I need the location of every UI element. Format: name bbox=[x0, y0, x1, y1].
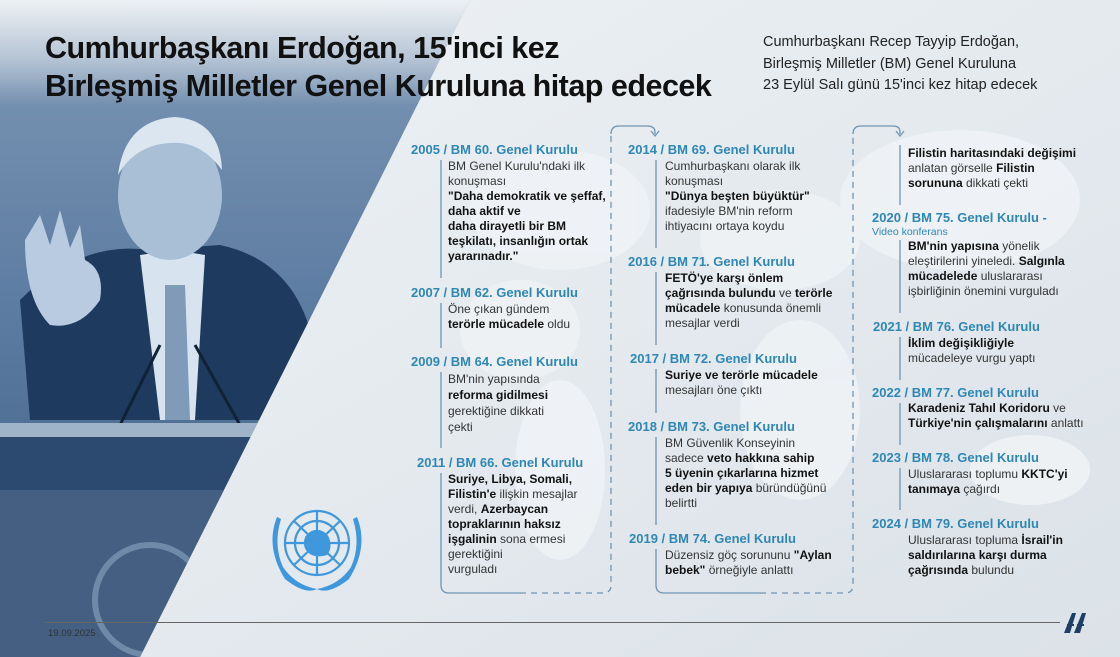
column 1: 2009 / BM 64. Genel Kurulu bbox=[411, 354, 578, 369]
column 3: 2020 / BM 75. Genel Kurulu - bbox=[872, 210, 1047, 225]
column 2: sadece veto hakkına sahip bbox=[665, 451, 814, 465]
title: Birleşmiş Milletler Genel Kuruluna hitap edecek bbox=[45, 69, 711, 103]
column 3: işbirliğinin önemini vurguladı bbox=[908, 284, 1059, 298]
column 3: Türkiye'nin çalışmalarını anlattı bbox=[908, 416, 1084, 430]
microphones bbox=[120, 345, 160, 425]
item 2017 bbox=[630, 351, 818, 397]
column 2: 2016 / BM 71. Genel Kurulu bbox=[628, 254, 795, 269]
column 3: İklim değişikliğiyle bbox=[908, 336, 1014, 350]
column 3: Karadeniz Tahıl Koridoru ve bbox=[908, 401, 1066, 415]
item 2024 bbox=[872, 516, 1063, 577]
column 3: 2021 / BM 76. Genel Kurulu bbox=[873, 319, 1040, 334]
column 1: 2005 / BM 60. Genel Kurulu bbox=[411, 142, 578, 157]
item 2019 continued: anlatan görselle Filistin bbox=[908, 161, 1035, 175]
suit bbox=[20, 245, 320, 420]
column 1: BM'nin yapısında bbox=[448, 372, 540, 386]
photo: Erdoğan at UN podium bbox=[0, 0, 470, 657]
item 2023 bbox=[872, 450, 1068, 496]
column 2: Suriye ve terörle mücadele bbox=[665, 368, 818, 382]
column 1: Öne çıkan gündem bbox=[448, 302, 549, 316]
item 2016 bbox=[628, 254, 832, 330]
column 3: mücadeleye vurgu yaptı bbox=[908, 351, 1035, 365]
column 3: 2024 / BM 79. Genel Kurulu bbox=[872, 516, 1039, 531]
column 2: BM Güvenlik Konseyinin bbox=[665, 436, 795, 450]
column 2: konuşması bbox=[665, 174, 723, 188]
column 2: eden bir yapıya büründüğünü bbox=[665, 481, 826, 495]
column 1: vurguladı bbox=[448, 562, 497, 576]
item 2014 bbox=[628, 142, 810, 233]
column 2: belirtti bbox=[665, 496, 697, 510]
column 1: reforma gidilmesi bbox=[448, 388, 548, 402]
title: Cumhurbaşkanı Erdoğan, 15'inci kez bbox=[45, 31, 559, 65]
item 2019 bbox=[629, 531, 832, 577]
column 2: ihtiyacını ortaya koydu bbox=[665, 219, 784, 233]
column 2: 5 üyenin çıkarlarına hizmet bbox=[665, 466, 818, 480]
column 1: topraklarının haksız bbox=[448, 517, 561, 531]
column 1: çekti bbox=[448, 420, 473, 434]
column 3: mücadelede uluslararası bbox=[908, 269, 1043, 283]
column 3: eleştirilerini yineledi. Salgınla bbox=[908, 254, 1065, 268]
column 1: 2011 / BM 66. Genel Kurulu bbox=[417, 455, 583, 470]
column 1: verdi, Azerbaycan bbox=[448, 502, 548, 516]
column 2: 2018 / BM 73. Genel Kurulu bbox=[628, 419, 795, 434]
podium bbox=[0, 423, 258, 437]
column 3: 2022 / BM 77. Genel Kurulu bbox=[872, 385, 1039, 400]
column 3 bbox=[872, 146, 1084, 577]
column 1: gerektiğine dikkati bbox=[448, 404, 544, 418]
column 2: mesajlar verdi bbox=[665, 316, 740, 330]
item 2021 bbox=[873, 319, 1040, 365]
column 2: ifadesiyle BM'nin reform bbox=[665, 204, 793, 218]
title bbox=[45, 31, 712, 103]
column 1: daha dirayetli bir BM bbox=[448, 219, 566, 233]
item 2019 continued bbox=[908, 146, 1076, 190]
column 1 bbox=[411, 142, 606, 576]
column 2: çağrısında bulundu ve terörle bbox=[665, 286, 832, 300]
column 1: "Daha demokratik ve şeffaf, bbox=[448, 189, 606, 203]
item 2011 bbox=[417, 455, 583, 576]
column 1: daha aktif ve bbox=[448, 204, 521, 218]
column 3: 2023 / BM 78. Genel Kurulu bbox=[872, 450, 1039, 465]
item 2019 continued: Filistin haritasındaki değişimi bbox=[908, 146, 1076, 160]
date: 19.09.2025 bbox=[48, 628, 96, 639]
item 2007 bbox=[411, 285, 578, 331]
column 2: mesajları öne çıktı bbox=[665, 383, 762, 397]
column 3: Video konferans bbox=[872, 226, 948, 238]
column 1: işgalinin sona ermesi bbox=[448, 532, 565, 546]
column 1: Filistin'e ilişkin mesajlar bbox=[448, 487, 578, 501]
column 2: bebek" örneğiyle anlattı bbox=[665, 563, 793, 577]
column 2: 2017 / BM 72. Genel Kurulu bbox=[630, 351, 797, 366]
column 2: mücadele konusunda önemli bbox=[665, 301, 821, 315]
column 3: Uluslararası toplumu KKTC'yi bbox=[908, 467, 1068, 481]
column 1: yararınadır." bbox=[448, 249, 518, 263]
column 3: Uluslararası topluma İsrail'in bbox=[908, 533, 1063, 547]
column 1: Suriye, Libya, Somali, bbox=[448, 472, 572, 486]
footer line bbox=[45, 622, 1060, 623]
item 2018 bbox=[628, 419, 826, 510]
column 3: BM'nin yapısına yönelik bbox=[908, 239, 1040, 253]
column 2: 2014 / BM 69. Genel Kurulu bbox=[628, 142, 795, 157]
column 2: Cumhurbaşkanı olarak ilk bbox=[665, 159, 800, 173]
subtitle: Cumhurbaşkanı Recep Tayyip Erdoğan, bbox=[763, 34, 1019, 50]
column 1: 2007 / BM 62. Genel Kurulu bbox=[411, 285, 578, 300]
column 1: terörle mücadele oldu bbox=[448, 317, 570, 331]
item 2019 continued: sorununa dikkati çekti bbox=[908, 176, 1028, 190]
column 3: çağrısında bulundu bbox=[908, 563, 1014, 577]
icon: AA logo bbox=[1064, 613, 1086, 633]
column 1: konuşması bbox=[448, 174, 506, 188]
column 1: BM Genel Kurulu'ndaki ilk bbox=[448, 159, 585, 173]
column 2: FETÖ'ye karşı önlem bbox=[665, 271, 783, 285]
subtitle: 23 Eylül Salı günü 15'inci kez hitap edecek bbox=[763, 77, 1037, 93]
column 1: teşkilatı, insanlığın ortak bbox=[448, 234, 588, 248]
column 2: "Dünya beşten büyüktür" bbox=[665, 189, 810, 203]
subtitle: Birleşmiş Milletler (BM) Genel Kuruluna bbox=[763, 56, 1016, 72]
subtitle bbox=[763, 34, 1038, 93]
item 2020 bbox=[872, 210, 1065, 298]
column 3: saldırılarına karşı durma bbox=[908, 548, 1047, 562]
head bbox=[118, 130, 222, 260]
column 1: gerektiğini bbox=[448, 547, 503, 561]
column 2: 2019 / BM 74. Genel Kurulu bbox=[629, 531, 796, 546]
item 2022 bbox=[872, 385, 1084, 430]
column 3: tanımaya çağırdı bbox=[908, 482, 1000, 496]
column 2 bbox=[628, 142, 832, 577]
column 2: Düzensiz göç sorununu "Aylan bbox=[665, 548, 832, 562]
item 2009 bbox=[411, 354, 578, 434]
item 2005 bbox=[411, 142, 606, 263]
hand bbox=[25, 210, 101, 326]
icon: UN emblem bbox=[272, 510, 362, 591]
